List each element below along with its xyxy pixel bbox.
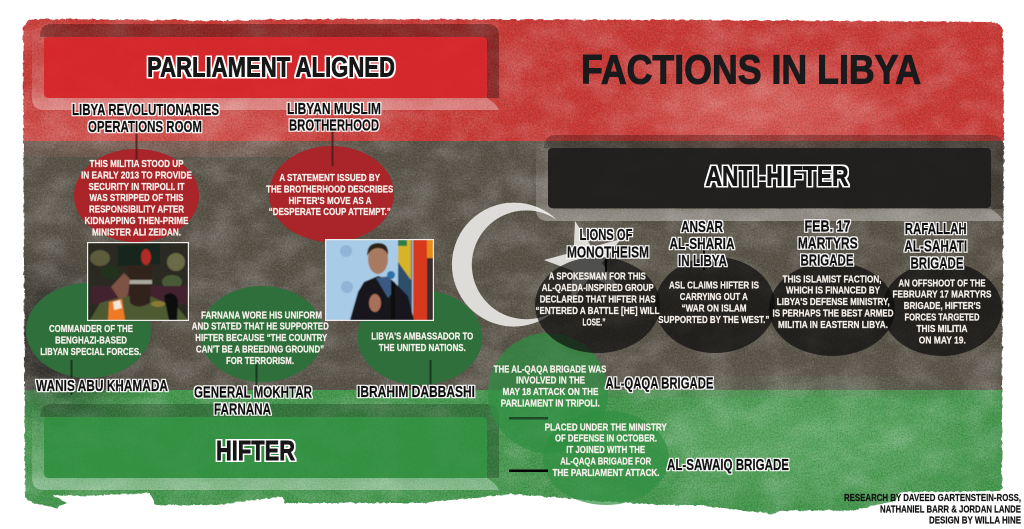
description: A STATEMENT ISSUED BY bbox=[279, 173, 380, 184]
description: MILITIA IN EASTERN LIBYA. bbox=[778, 320, 888, 331]
faction: Feb. 17 Martyrs Brigade bbox=[772, 219, 894, 331]
description: ASL CLAIMS HIFTER IS bbox=[669, 281, 759, 292]
description: “WAR ON ISLAM bbox=[682, 304, 746, 314]
description bbox=[658, 281, 769, 326]
description: PARLIAMENT IN TRIPOLI. bbox=[501, 398, 600, 410]
description: LIBYA'S AMBASSADOR TO bbox=[371, 332, 473, 343]
description: RESPONSIBILITY AFTER bbox=[89, 205, 185, 216]
label: AL-SHARIA bbox=[670, 236, 735, 253]
description bbox=[494, 364, 607, 410]
label: LIONS OF bbox=[580, 227, 633, 244]
description bbox=[192, 310, 329, 367]
icon: crescent and star bbox=[452, 203, 621, 327]
description: CAN'T BE A BREEDING GROUND” bbox=[196, 344, 324, 356]
label bbox=[72, 102, 219, 136]
label: ANSAR bbox=[681, 219, 723, 236]
panel: parliament aligned bbox=[32, 24, 499, 110]
description: AL-QAQA BRIGADE FOR bbox=[560, 456, 652, 468]
description: CARRYING OUT A bbox=[680, 292, 748, 303]
name: FARNANA bbox=[214, 402, 271, 419]
description bbox=[81, 159, 192, 238]
heading: anti-hifter: ANTI-HIFTER bbox=[706, 160, 848, 192]
description: WAS STRIPPED OF THIS bbox=[90, 193, 184, 204]
faction: Lions of Monotheism bbox=[536, 227, 660, 328]
description: LIBYA'S DEFENSE MINISTRY, bbox=[777, 297, 890, 308]
description: AND STATED THAT HE SUPPORTED bbox=[192, 322, 329, 333]
person: Ibrahim Dabbashi bbox=[357, 290, 482, 401]
description bbox=[371, 332, 473, 354]
description: FORCES TARGETED bbox=[904, 312, 980, 324]
name bbox=[194, 385, 312, 419]
description: THIS MILITIA STOOD UP bbox=[90, 159, 184, 170]
label: LIBYA REVOLUTIONARIES bbox=[72, 102, 219, 119]
description: HIFTER BECAUSE “THE COUNTRY bbox=[195, 333, 328, 344]
name: WANIS ABU KHAMADA bbox=[36, 378, 168, 395]
description: IN EARLY 2013 TO PROVIDE bbox=[81, 170, 192, 181]
description: HIFTER'S MOVE AS A bbox=[288, 196, 372, 207]
description: MINISTER ALI ZEIDAN. bbox=[92, 227, 181, 238]
description: MAY 18 ATTACK ON THE bbox=[502, 387, 599, 398]
panel: hifter bbox=[32, 404, 499, 490]
description: “DESPERATE COUP ATTEMPT.” bbox=[269, 207, 391, 218]
description: AN OFFSHOOT OF THE bbox=[898, 278, 986, 289]
faction: Al-Sawaiq Brigade bbox=[509, 411, 789, 505]
label: RAFALLAH bbox=[905, 221, 967, 238]
description: THE AL-QAQA BRIGADE WAS bbox=[494, 364, 607, 375]
label: BROTHERHOOD bbox=[289, 118, 379, 134]
description: FEBRUARY 17 MARTYRS bbox=[892, 290, 992, 301]
description: THE PARLIAMENT ATTACK. bbox=[552, 468, 660, 479]
description: SUPPORTED BY THE WEST.” bbox=[658, 315, 769, 326]
description: WHICH IS FINANCED BY bbox=[786, 286, 880, 297]
label: LIBYAN MUSLIM bbox=[287, 101, 381, 118]
credits bbox=[844, 493, 1021, 527]
name: IBRAHIM DABBASHI bbox=[357, 384, 475, 401]
description bbox=[40, 324, 141, 358]
description: THE UNITED NATIONS. bbox=[379, 343, 466, 354]
person: General Mokhtar Farnana bbox=[192, 286, 329, 419]
description bbox=[266, 173, 393, 218]
description: IS PERHAPS THE BEST ARMED bbox=[772, 308, 894, 320]
title: FACTIONS IN LIBYA bbox=[581, 46, 921, 92]
description: FOR TERRORISM. bbox=[226, 356, 294, 367]
description: BRIGADE, HIFTER'S bbox=[904, 301, 981, 312]
faction: Al-Qaqa Brigade bbox=[488, 333, 714, 453]
description: FARNANA WORE HIS UNIFORM bbox=[201, 310, 322, 321]
description: COMMANDER OF THE bbox=[49, 324, 133, 335]
description: THIS MILITIA bbox=[916, 324, 968, 335]
description: KIDNAPPING THEN-PRIME bbox=[84, 216, 189, 227]
description: PLACED UNDER THE MINISTRY bbox=[545, 422, 667, 433]
label bbox=[567, 227, 649, 261]
description bbox=[545, 422, 667, 479]
label: IN LIBYA bbox=[678, 253, 727, 270]
description: DECLARED THAT HIFTER HAS bbox=[540, 294, 656, 306]
description: BENGHAZI-BASED bbox=[55, 335, 127, 346]
name: GENERAL MOKHTAR bbox=[194, 385, 312, 402]
panel: anti-hifter bbox=[536, 135, 1003, 221]
description: A SPOKESMAN FOR THIS bbox=[549, 272, 646, 283]
name: AL-SAWAIQ BRIGADE bbox=[667, 457, 789, 474]
name: AL-QAQA BRIGADE bbox=[606, 375, 714, 392]
description: OF DEFENSE IN OCTOBER. bbox=[555, 434, 657, 445]
label: MONOTHEISM bbox=[567, 244, 649, 261]
description: “ENTERED A BATTLE [HE] WILL bbox=[536, 306, 660, 317]
description: ON MAY 19. bbox=[919, 335, 966, 346]
description: LOSE.” bbox=[582, 317, 606, 328]
description: THE BROTHERHOOD DESCRIBES bbox=[266, 184, 393, 195]
faction: Libya Revolutionaries Operations Room bbox=[72, 102, 219, 242]
person: Wanis Abu Khamada bbox=[26, 283, 168, 395]
label: MARTYRS bbox=[798, 236, 858, 253]
label: AL-SAHATI bbox=[904, 238, 967, 255]
photo: Ibrahim Dabbashi bbox=[325, 239, 434, 321]
heading: hifter: HIFTER bbox=[216, 435, 295, 466]
label: BRIGADE bbox=[910, 256, 964, 272]
heading: parliament aligned: PARLIAMENT ALIGNED bbox=[147, 52, 395, 82]
label: OPERATIONS ROOM bbox=[88, 119, 202, 136]
label: BRIGADE bbox=[800, 253, 854, 270]
description bbox=[772, 274, 894, 331]
description bbox=[892, 278, 992, 346]
faction: Rafallah al-Sahati Brigade bbox=[892, 221, 992, 346]
faction: Libyan Muslim Brotherhood bbox=[266, 101, 394, 242]
description: LIBYAN SPECIAL FORCES. bbox=[40, 347, 141, 358]
photo: Wanis Abu Khamada bbox=[87, 242, 189, 321]
label bbox=[670, 219, 735, 270]
description: AL-QAEDA-INSPIRED GROUP bbox=[542, 283, 654, 294]
label: FEB. 17 bbox=[804, 219, 851, 236]
anti-hifter circles bbox=[535, 257, 1002, 356]
description: INVOLVED IN THE bbox=[516, 376, 585, 387]
description: THIS ISLAMIST FACTION, bbox=[782, 274, 882, 285]
label bbox=[287, 101, 381, 134]
description bbox=[536, 272, 660, 328]
label bbox=[904, 221, 967, 272]
label bbox=[798, 219, 858, 270]
description: IT JOINED WITH THE bbox=[566, 445, 645, 456]
faction: Ansar al-Sharia in Libya bbox=[658, 219, 769, 326]
description: SECURITY IN TRIPOLI. IT bbox=[88, 182, 184, 193]
